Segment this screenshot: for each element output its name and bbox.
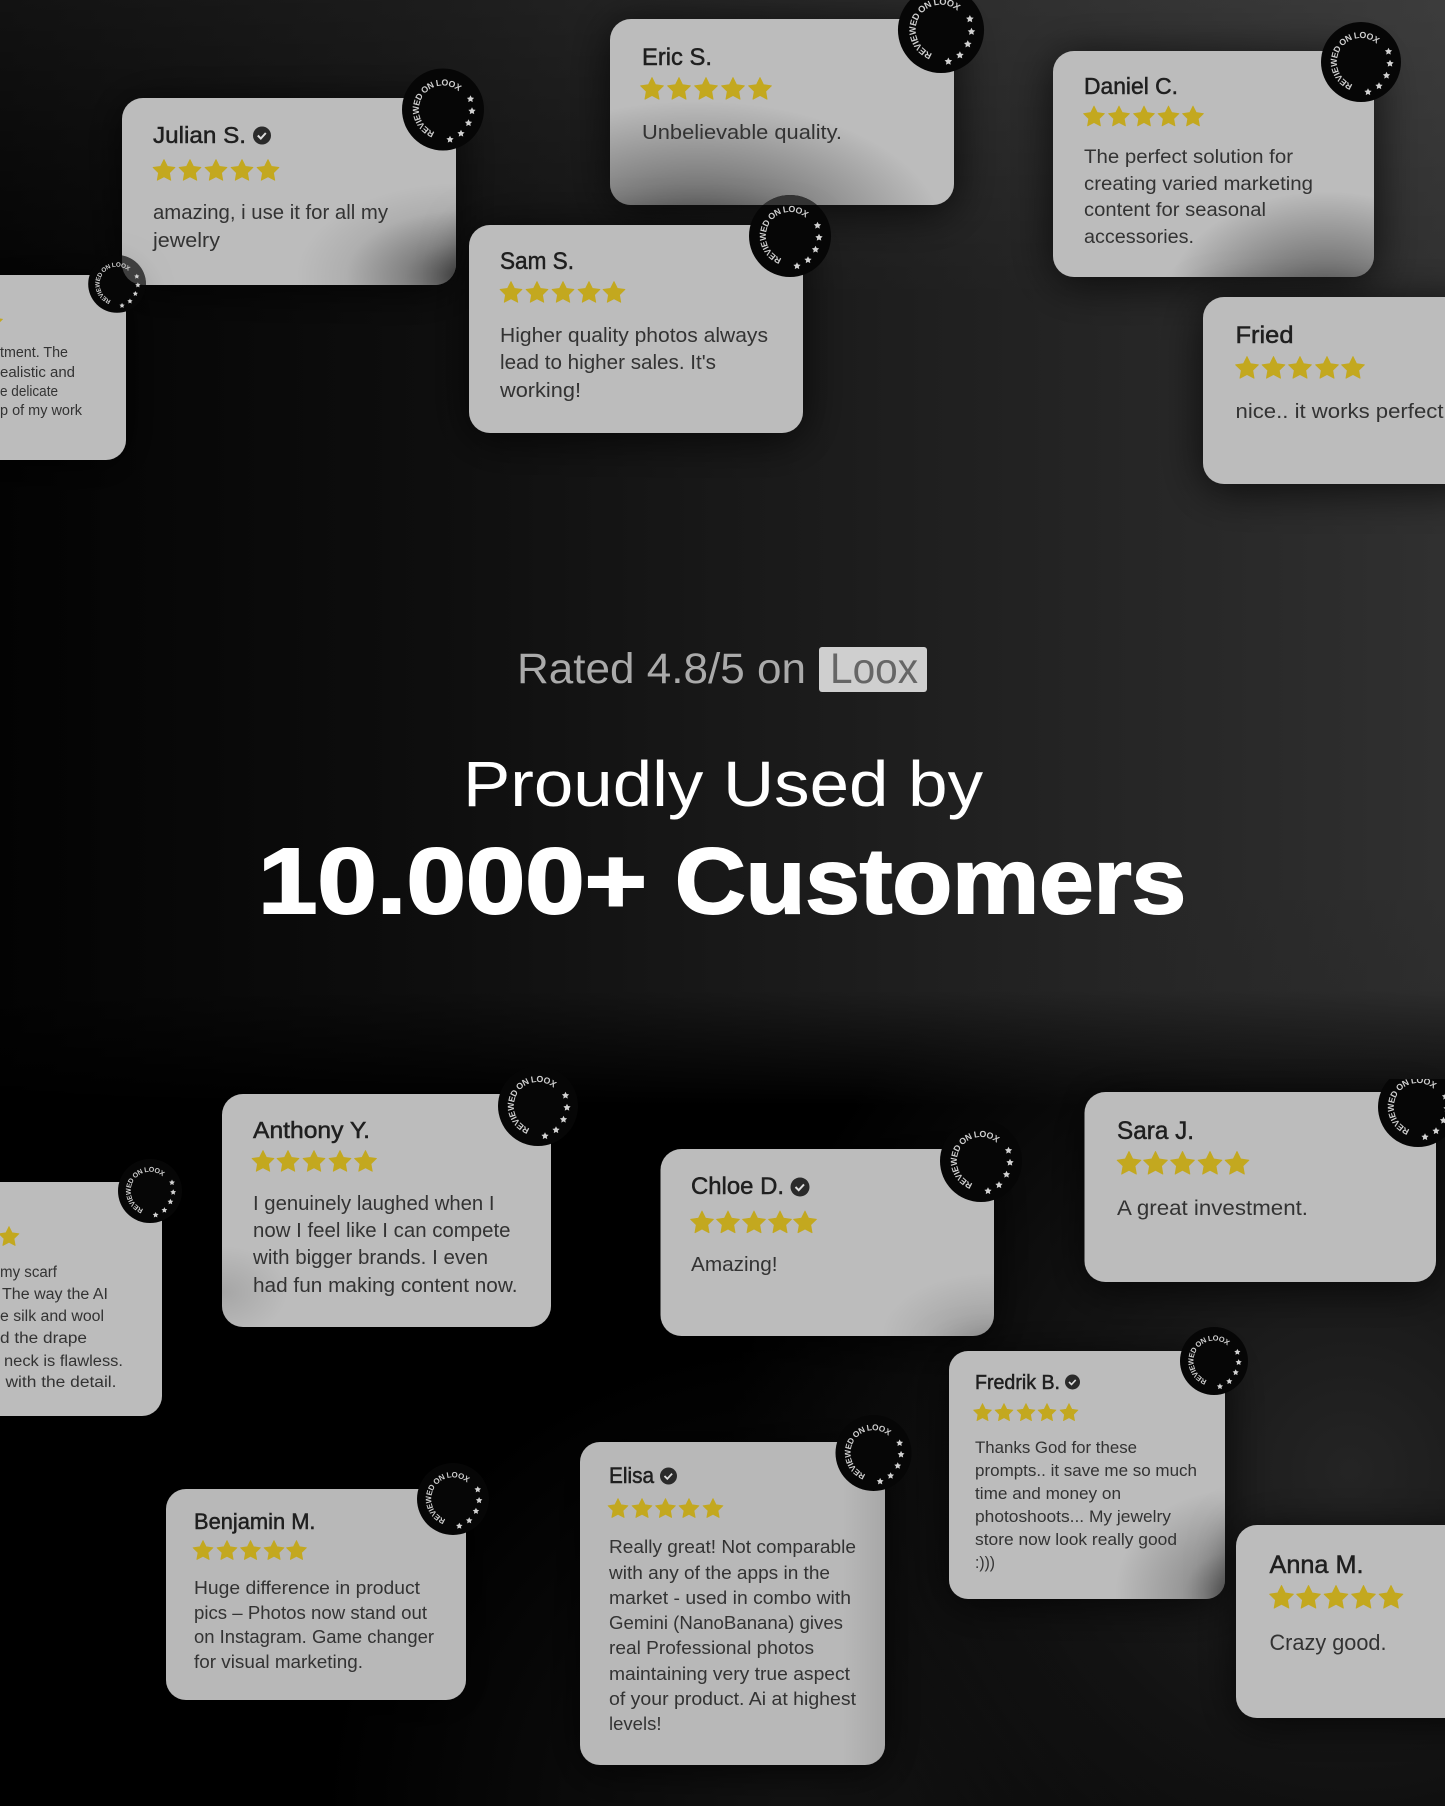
review text: Amazing! — [691, 1254, 778, 1276]
badge: reviewed on Loox: REVIEWED ON LOOX — [126, 1166, 166, 1214]
badge: reviewed on Loox — [749, 195, 831, 277]
Loox label: Loox — [830, 645, 918, 693]
review text: neck is flawless. — [4, 1353, 123, 1370]
reviewer name: Fried — [1236, 322, 1294, 349]
review text: d the drape — [0, 1330, 87, 1347]
badge: reviewed on Loox — [417, 1472, 482, 1535]
review card: partial left bottom — [0, 1166, 176, 1416]
review text: real Professional photos — [609, 1637, 814, 1658]
review text — [252, 1193, 518, 1297]
review text: The way the AI — [2, 1286, 108, 1303]
heading: 10.000+ Customers: 10.000+ — [258, 829, 647, 933]
reviewer name: Benjamin M. — [194, 1509, 316, 1534]
review text: accessories. — [1084, 227, 1194, 248]
badge: reviewed on Loox — [898, 0, 984, 73]
five star rating — [608, 1498, 723, 1517]
review card: Benjamin M. — [166, 1472, 482, 1700]
review card: Chloe D. — [660, 1130, 1014, 1336]
review card: Elisa — [580, 1424, 904, 1765]
review text: market - used in combo with — [609, 1587, 851, 1608]
review card: Anna M. — [1236, 1525, 1445, 1718]
icon: verified check — [790, 1178, 810, 1196]
badge: reviewed on Loox: REVIEWED ON LOOX — [1188, 1335, 1230, 1385]
five star rating — [1117, 1152, 1249, 1174]
badge: reviewed on Loox — [118, 1166, 176, 1223]
review text: on Instagram. Game changer — [194, 1626, 434, 1647]
badge: reviewed on Loox: REVIEWED ON LOOX — [412, 79, 462, 138]
badge: reviewed on Loox: REVIEWED ON LOOX — [95, 262, 131, 304]
badge: reviewed on Loox: REVIEWED ON LOOX — [508, 1076, 557, 1134]
badge: reviewed on Loox: REVIEWED ON LOOX — [1330, 32, 1380, 90]
review card: Fried — [1203, 297, 1445, 484]
badge: reviewed on Loox (clipped) — [1378, 1079, 1445, 1147]
five star rating — [193, 1540, 306, 1559]
review text: creating varied marketing — [1084, 174, 1313, 195]
review text — [499, 325, 768, 402]
reviewer name: Julian S. — [153, 122, 246, 148]
review text: Thanks God for these — [975, 1439, 1137, 1457]
heading: Proudly Used by: Proudly Used by — [463, 748, 983, 820]
badge: reviewed on Loox — [498, 1076, 571, 1146]
badge: reviewed on Loox — [1321, 22, 1401, 102]
reviewer name: Anthony Y. — [253, 1117, 370, 1143]
review text: Higher quality photos always — [500, 325, 768, 347]
review card: Sara J. — [1084, 1079, 1445, 1292]
review text — [608, 1536, 856, 1734]
badge: reviewed on Loox — [1180, 1327, 1248, 1395]
five star rating — [691, 1211, 816, 1233]
badge: reviewed on Loox: REVIEWED ON LOOX — [844, 1424, 892, 1480]
badge: reviewed on Loox (clipped): REVIEWED ON LOOX — [1388, 1079, 1437, 1135]
reviewer name: Anna M. — [1270, 1551, 1364, 1579]
review text — [152, 202, 388, 252]
reviewer name: Daniel C. — [1084, 73, 1178, 99]
review card: partial left top — [0, 255, 150, 460]
review text — [1084, 147, 1313, 248]
review text: lead to higher sales. It's — [500, 352, 716, 374]
five star rating — [1084, 106, 1203, 126]
five star rating — [153, 160, 279, 180]
badge: reviewed on Loox: REVIEWED ON LOOX — [760, 206, 809, 264]
badge: reviewed on Loox — [88, 255, 146, 313]
badge: reviewed on Loox — [836, 1424, 904, 1491]
review text — [0, 345, 83, 419]
review text: content for seasonal — [1084, 200, 1266, 221]
review text: Gemini (NanoBanana) gives — [609, 1612, 843, 1633]
review text: Really great! Not comparable — [609, 1536, 856, 1557]
review text: working! — [499, 380, 581, 402]
icon: verified check — [253, 126, 271, 144]
review text: nice.. it works perfectly — [1236, 401, 1445, 423]
reviewer name: Sam S. — [500, 248, 574, 275]
review text — [0, 1264, 123, 1391]
review text — [975, 1439, 1197, 1572]
review text: I genuinely laughed when I — [253, 1193, 494, 1215]
review text: prompts.. it save me so much — [975, 1462, 1197, 1480]
review text: A great investment. — [1117, 1197, 1308, 1220]
review text: p of my work — [0, 403, 83, 419]
review card: Eric S. — [602, 0, 984, 220]
review text: Crazy good. — [1270, 1630, 1386, 1655]
review text: levels! — [609, 1713, 662, 1734]
review card: Fredrik B. — [948, 1327, 1248, 1606]
reviewer name: Eric S. — [642, 44, 712, 71]
review text: with the detail. — [4, 1374, 116, 1391]
review text: ealistic and — [0, 365, 75, 381]
review card: Daniel C. — [1040, 22, 1401, 296]
five star rating — [641, 78, 771, 99]
review text: now I feel like I can compete — [253, 1220, 510, 1242]
review text: e delicate — [0, 384, 58, 400]
star fragment — [0, 313, 3, 329]
badge: reviewed on Loox — [940, 1130, 1014, 1202]
review text: amazing, i use it for all my — [153, 202, 388, 224]
review text: with any of the apps in the — [608, 1562, 830, 1583]
badge: reviewed on Loox — [402, 68, 484, 150]
review card: Julian S. — [122, 68, 484, 285]
review text: jewelry — [152, 230, 220, 252]
review text: store now look really good — [975, 1531, 1177, 1549]
rating line — [517, 645, 927, 693]
review text: :))) — [975, 1554, 995, 1572]
icon: verified check — [1065, 1374, 1080, 1390]
badge: reviewed on Loox: REVIEWED ON LOOX — [426, 1472, 470, 1524]
review text: e silk and wool — [0, 1308, 104, 1325]
icon: verified check — [660, 1468, 677, 1484]
review text: my scarf — [0, 1264, 58, 1281]
five star rating — [252, 1150, 376, 1171]
review card: Sam S. — [444, 195, 831, 442]
review text: Unbelievable quality. — [642, 122, 842, 144]
review text: maintaining very true aspect — [609, 1663, 850, 1684]
review text: had fun making content now. — [253, 1275, 518, 1297]
review text: time and money on — [975, 1485, 1121, 1503]
review text: with bigger brands. I even — [252, 1247, 488, 1269]
five star rating — [500, 282, 625, 302]
reviewer name: Elisa — [609, 1463, 655, 1488]
review text: pics – Photos now stand out — [194, 1602, 427, 1623]
review text: for visual marketing. — [194, 1651, 363, 1672]
heading: 10.000+ Customers: Customers — [675, 829, 1186, 933]
five star rating — [1270, 1586, 1403, 1608]
five star rating — [973, 1404, 1078, 1421]
review text: tment. The — [0, 345, 68, 361]
badge: reviewed on Loox: REVIEWED ON LOOX — [950, 1130, 1000, 1189]
five star rating — [1236, 356, 1364, 378]
review text — [194, 1577, 434, 1672]
reviewer name: Fredrik B. — [975, 1372, 1060, 1394]
heading: 10.000+ Customers — [258, 829, 1186, 933]
reviewer name: Sara J. — [1117, 1117, 1194, 1145]
review text: Huge difference in product — [194, 1577, 420, 1598]
review text: The perfect solution for — [1084, 147, 1294, 168]
review text: photoshoots... My jewelry — [975, 1508, 1172, 1526]
review card: Anthony Y. — [222, 1076, 571, 1327]
rating line: Rated 4.8/5 on — [517, 645, 806, 693]
review text: of your product. Ai at highest — [609, 1688, 856, 1709]
reviewer name: Chloe D. — [691, 1173, 784, 1200]
star fragment — [0, 1226, 19, 1245]
